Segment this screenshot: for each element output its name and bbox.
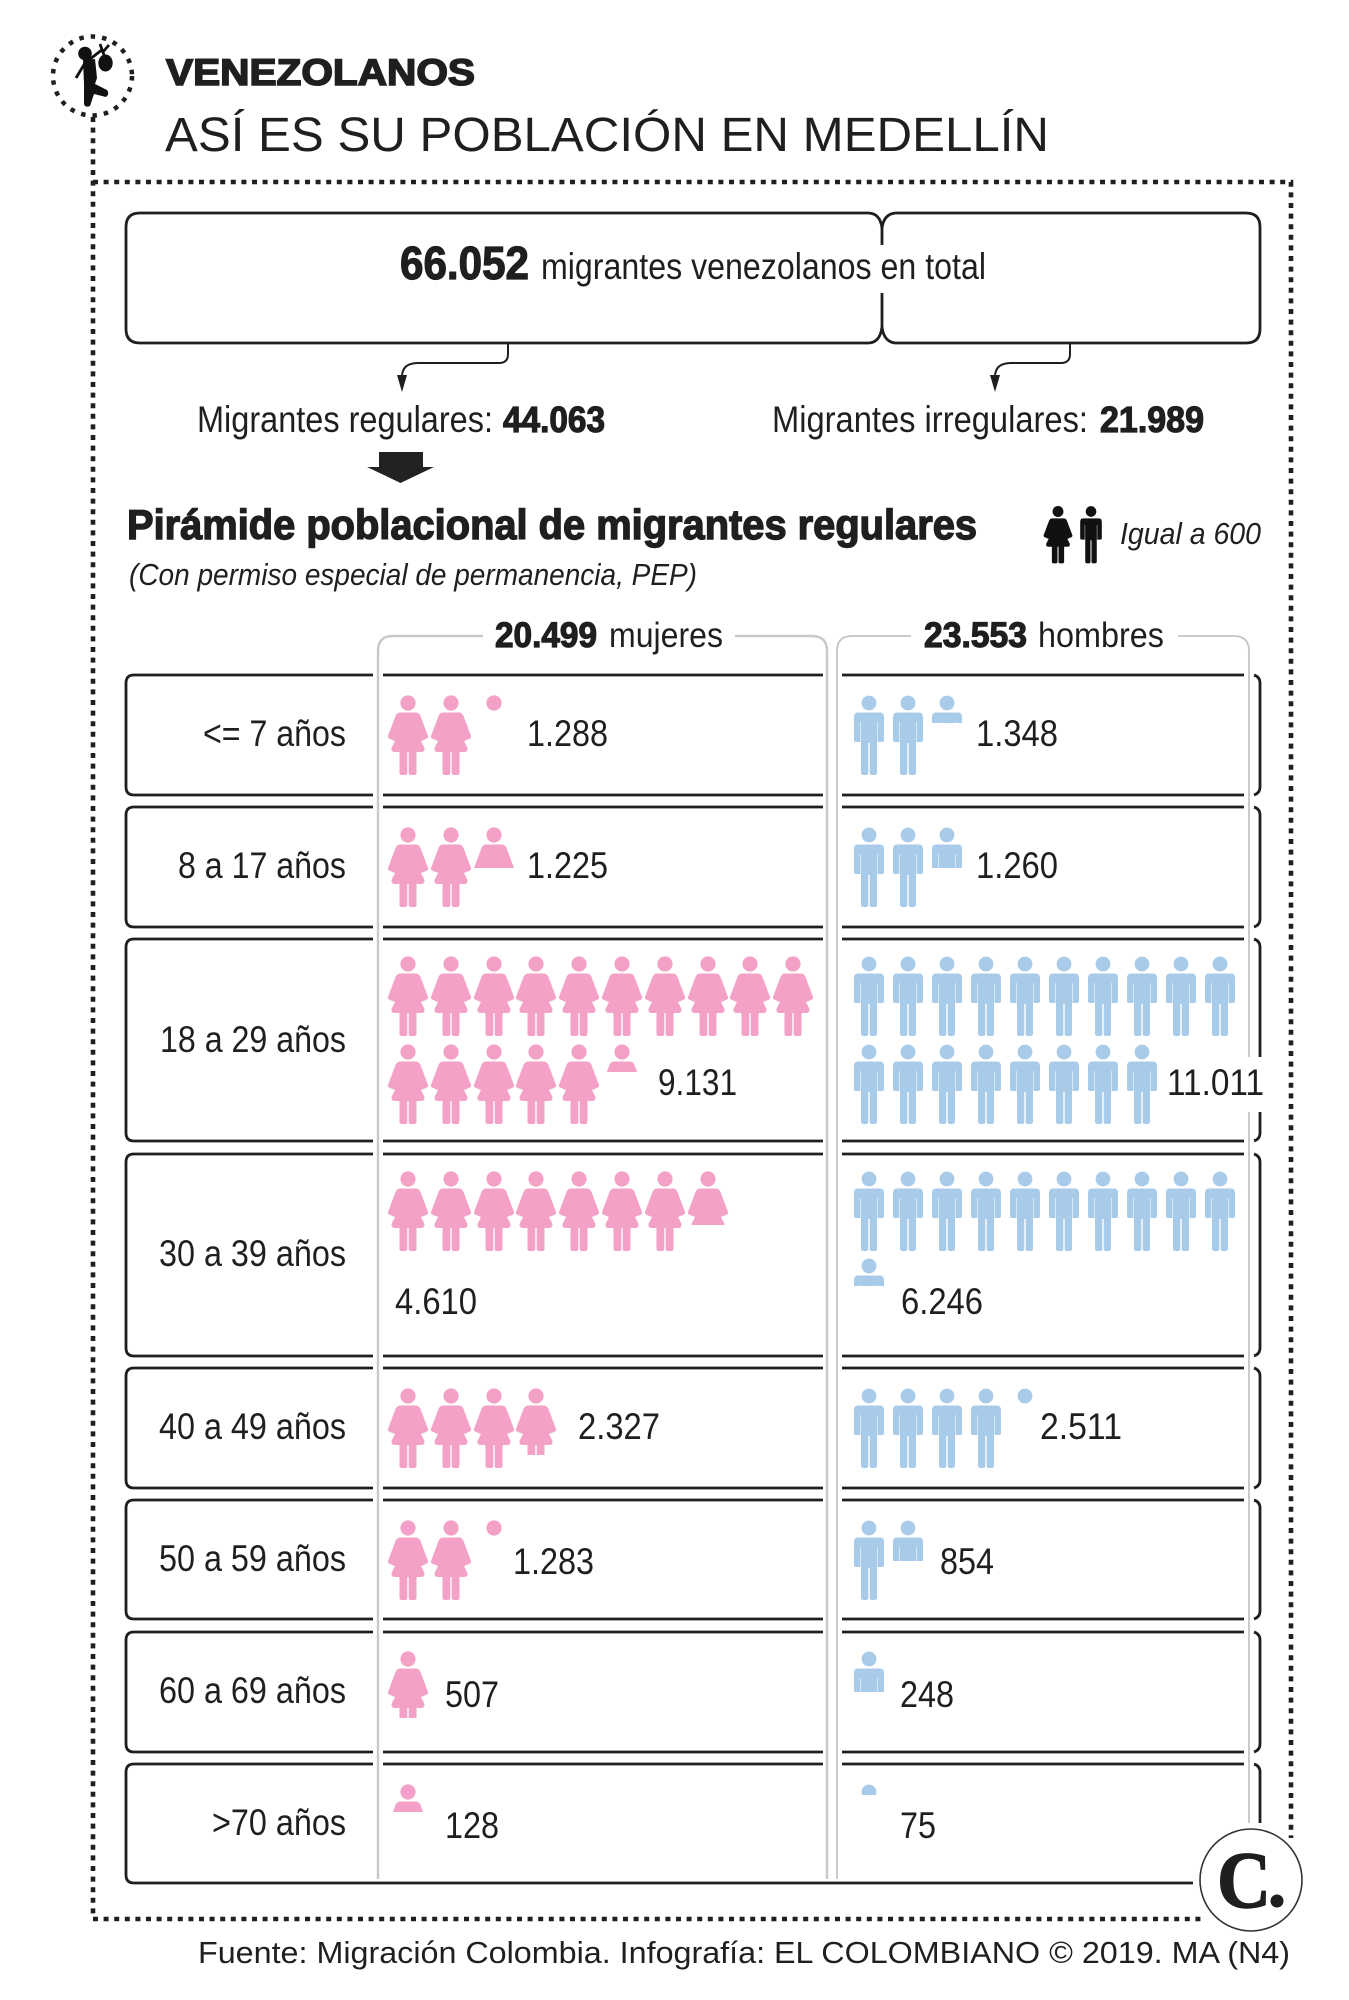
women value: 128 (445, 1805, 499, 1846)
age label: <= 7 años (203, 713, 346, 754)
men value: 11.011 (1167, 1062, 1264, 1103)
row: 40 to 49 (159, 1388, 1122, 1468)
irregular migrants figure: Migrantes irregulares: (772, 399, 1088, 440)
subtitle: ASÍ ES SU POBLACIÓN EN MEDELLÍN (165, 108, 1049, 162)
total figure: migrantes venezolanos en total (541, 246, 986, 287)
men value: 2.511 (1040, 1406, 1122, 1447)
men value: 1.260 (976, 845, 1058, 886)
header: women total: 20.499 (495, 616, 597, 655)
men icon (862, 1784, 876, 1795)
men icons (854, 828, 962, 907)
source line: Fuente: Migración Colombia. Infografía: EL COLOMBIANO © 2019. MA (N4) (198, 1935, 1290, 1970)
row: over 70 (214, 1784, 935, 1838)
arrow: thick down arrow (367, 452, 434, 483)
row: 60 to 69 (160, 1651, 953, 1718)
age label: 30 a 39 años (159, 1233, 346, 1274)
men icons (854, 1172, 1235, 1286)
legend: one pair equals 600 (1044, 506, 1261, 563)
logo: El Colombiano: C (1217, 1837, 1271, 1925)
regular migrants figure: Migrantes regulares: (197, 399, 493, 440)
women icons (388, 1171, 728, 1251)
total box (126, 213, 1260, 343)
men value: 6.246 (901, 1281, 983, 1322)
row: 50 to 59 (159, 1520, 994, 1600)
panel frame: women (378, 636, 827, 1879)
women icon (393, 1784, 423, 1812)
women icons (388, 1388, 556, 1468)
row: 18 to 29 (160, 956, 1265, 1124)
age label: 8 a 17 años (178, 845, 346, 886)
women icons (388, 1520, 514, 1600)
women value: 4.610 (395, 1281, 477, 1322)
header: men total: 23.553 (924, 616, 1027, 655)
row: under 7 (203, 695, 1058, 775)
age label: 50 a 59 años (159, 1538, 346, 1579)
note: special permit: (Con permiso especial de permanencia, PEP) (129, 557, 697, 592)
women value: 9.131 (658, 1062, 737, 1103)
title: VENEZOLANOS: VENEZOLANOS (166, 52, 475, 93)
panel frame: men (837, 636, 1249, 1879)
age label: 40 a 49 años (159, 1406, 346, 1447)
women value: 1.225 (527, 845, 608, 886)
women icon (388, 1651, 428, 1718)
row: 30 to 39 (160, 1171, 1235, 1314)
men icons (854, 1521, 923, 1600)
header: women total: mujeres (609, 616, 723, 655)
women value: 1.288 (527, 713, 608, 754)
men icons (854, 696, 962, 775)
arrow: to irregular migrants (990, 343, 1070, 392)
header: men total: hombres (1038, 616, 1164, 655)
arrow: to regular migrants (397, 343, 508, 392)
men icons (854, 957, 1235, 1124)
men value: 248 (900, 1674, 954, 1715)
women icons (388, 827, 514, 907)
legend: one pair equals 600: Igual a 600 (1120, 516, 1261, 551)
table row rules and brackets (126, 675, 1260, 1883)
women value: 1.283 (513, 1541, 594, 1582)
women icons (388, 956, 813, 1124)
heading: population pyramid: Pirámide poblacional de migrantes regulares (127, 501, 977, 548)
women icons (388, 695, 514, 775)
row: 8 to 17 (178, 827, 1058, 907)
age label: 18 a 29 años (160, 1019, 346, 1060)
men icons (854, 1389, 1040, 1468)
men value: 1.348 (976, 713, 1058, 754)
women value: 2.327 (578, 1406, 660, 1447)
women value: 507 (445, 1674, 499, 1715)
age label: >70 años (212, 1802, 346, 1843)
regular migrants figure: 44.063 (503, 399, 605, 440)
age label: 60 a 69 años (159, 1670, 346, 1711)
men value: 854 (940, 1541, 994, 1582)
logo: El Colombiano (1200, 1829, 1302, 1931)
irregular migrants figure: 21.989 (1100, 399, 1204, 440)
icon: migrant with bundle in dotted circle (53, 36, 132, 116)
men icon (854, 1652, 884, 1692)
men value: 75 (900, 1805, 936, 1846)
total figure: 66.052 (400, 237, 529, 289)
